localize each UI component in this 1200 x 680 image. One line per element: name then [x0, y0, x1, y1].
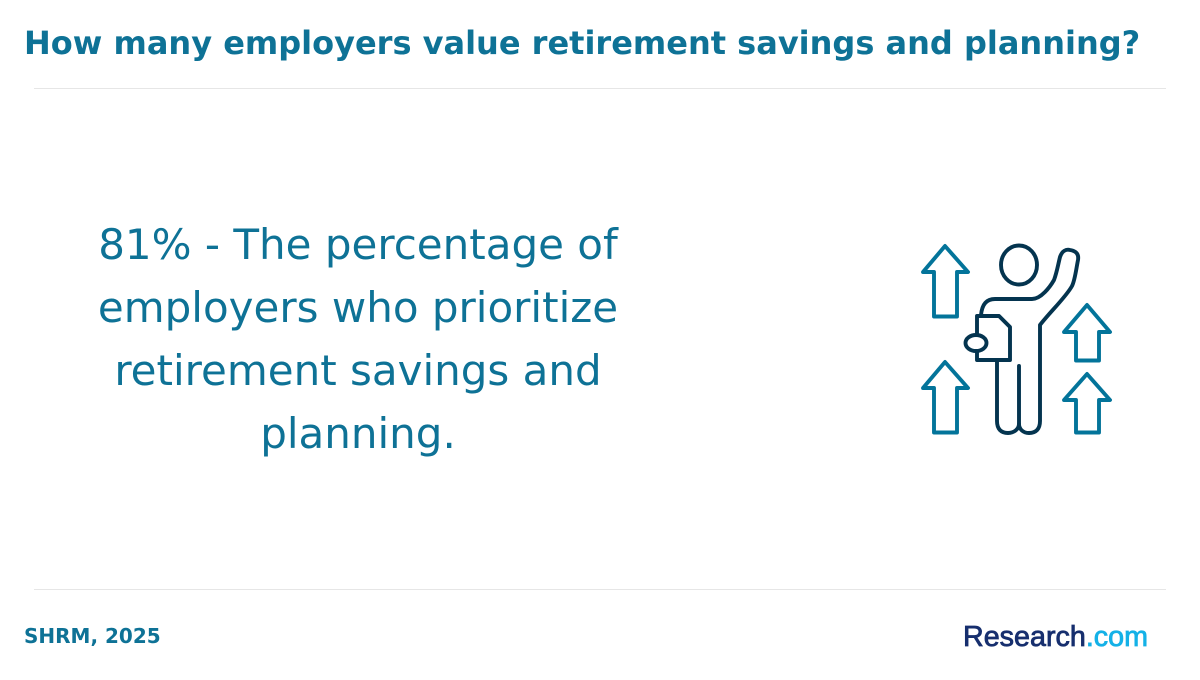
logo: Research.com: Research.com	[963, 621, 1148, 653]
icon: person with clipboard and rising arrows	[921, 244, 1112, 435]
source: SHRM, 2025	[24, 624, 161, 648]
main statistic text: 81% - The percentage of	[98, 220, 618, 269]
icon: arrows	[923, 246, 1110, 432]
main statistic text: employers who prioritize	[98, 283, 618, 332]
main statistic text: retirement savings and	[114, 346, 602, 395]
icon: person	[966, 246, 1078, 433]
main statistic text	[98, 220, 619, 458]
main statistic text: planning.	[260, 409, 456, 458]
title: How many employers value retirement savings and planning?	[24, 24, 1140, 62]
